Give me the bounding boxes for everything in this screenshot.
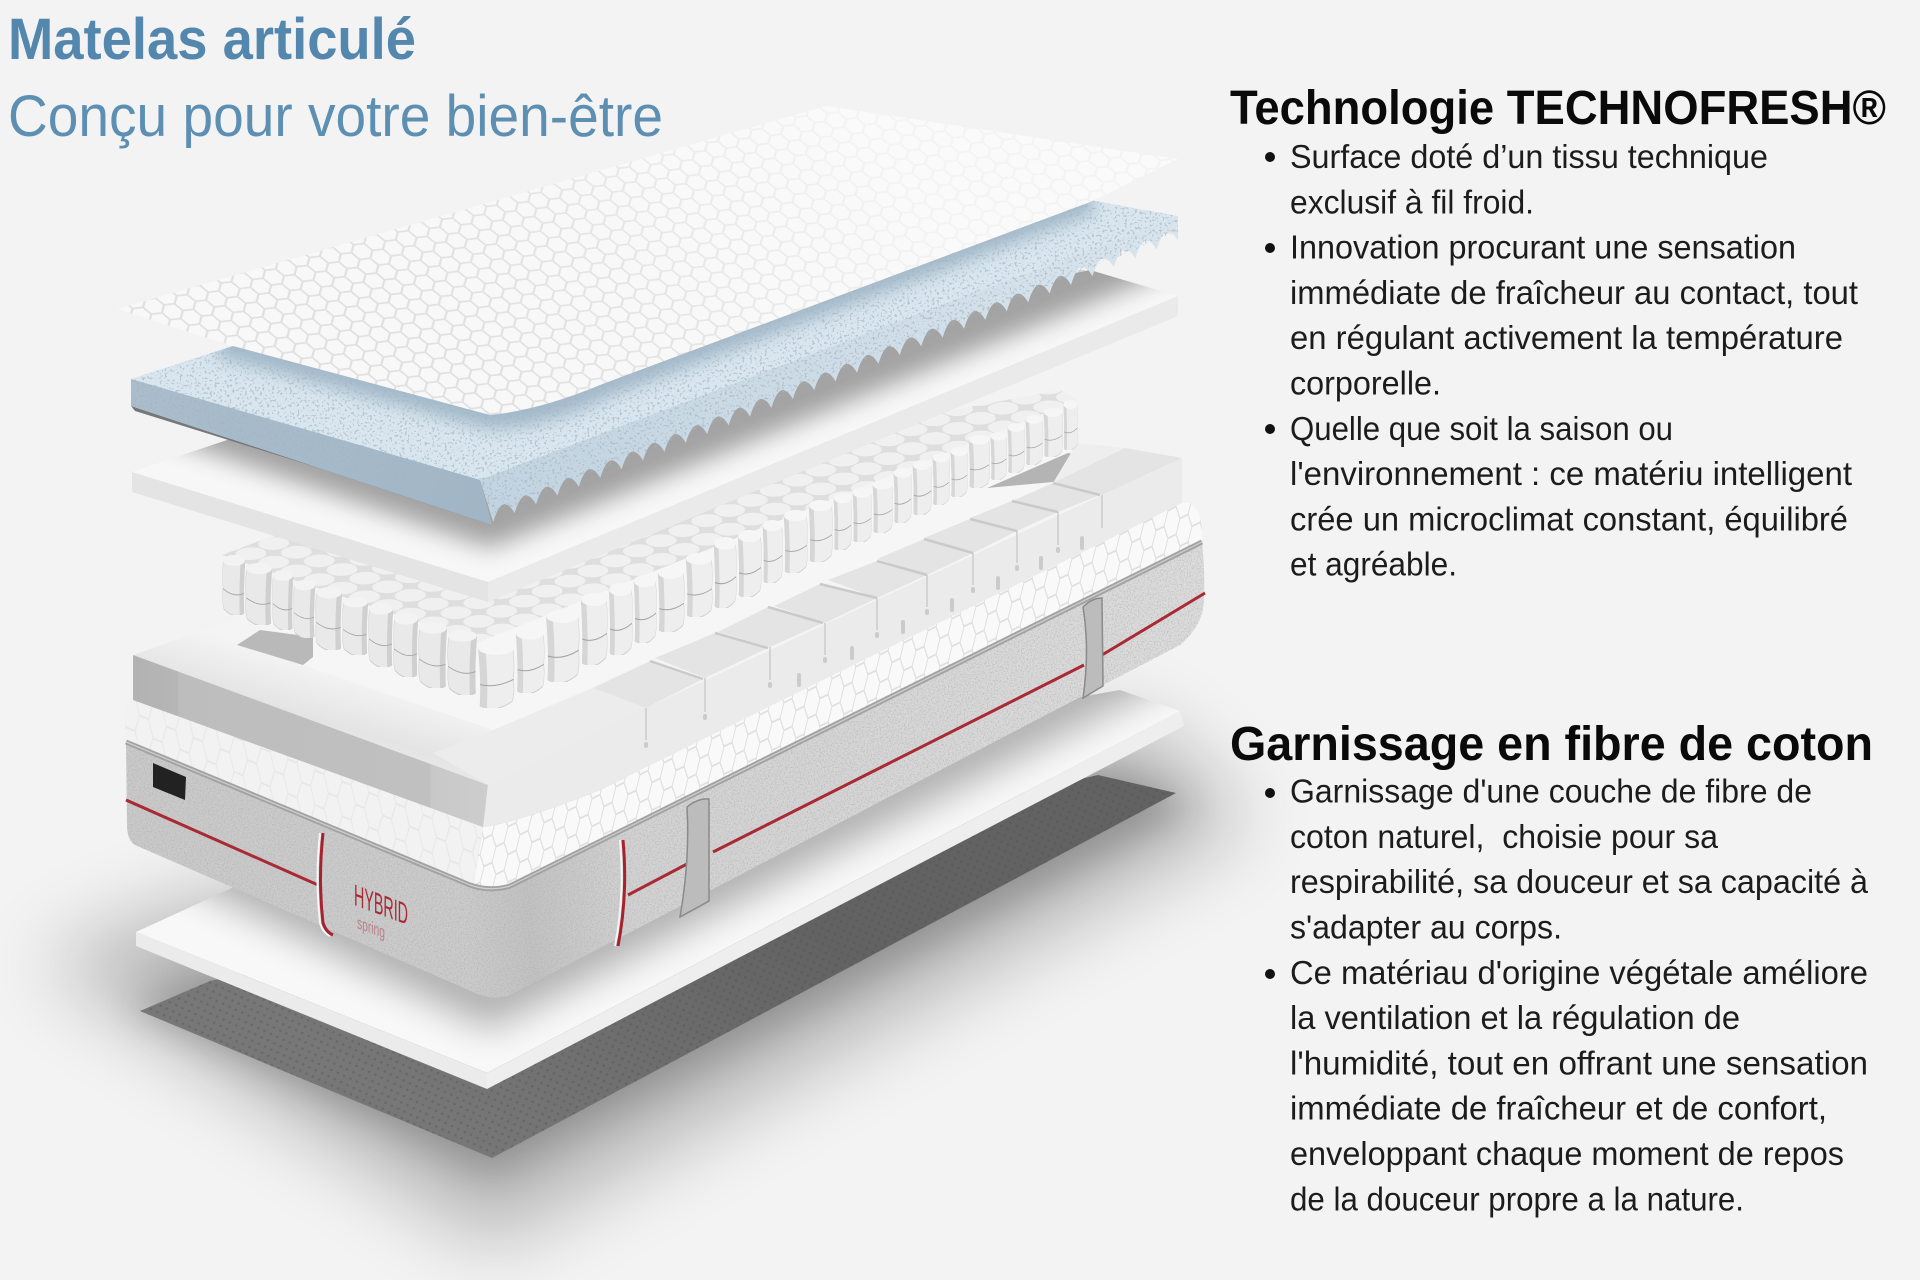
inner wall left <box>237 630 313 665</box>
bullet text: Ce matériau d'origine végétale améliore <box>1290 954 1868 991</box>
bullet text: en régulant activement la température <box>1290 319 1843 356</box>
layer: foam frame with zoned blocks <box>133 443 1182 827</box>
quilted band left side <box>125 698 483 887</box>
bullet text: immédiate de fraîcheur et de confort, <box>1290 1090 1827 1127</box>
zone notches <box>646 495 1102 740</box>
section: Garnissage en fibre de coton <box>1230 718 1873 1217</box>
blue foam speckle <box>131 200 1178 515</box>
bullet text: immédiate de fraîcheur au contact, tout <box>1290 274 1858 311</box>
springs front row <box>479 400 1078 709</box>
bullet text: respirabilité, sa douceur et sa capacité à <box>1290 863 1869 900</box>
inner wall right <box>987 453 1100 488</box>
bullets <box>1265 788 1275 979</box>
frame back strip <box>1053 443 1125 495</box>
bullet text: Surface doté d’un tissu technique <box>1290 138 1768 175</box>
layer: white comfort foam <box>132 270 1178 602</box>
bullet text: corporelle. <box>1290 364 1441 402</box>
block edge shading <box>650 483 1100 679</box>
red piping <box>126 593 1205 895</box>
left face <box>133 655 488 827</box>
springs top surface <box>222 390 1077 643</box>
block tops <box>593 448 1182 708</box>
zipper piping <box>126 542 1202 889</box>
heading: Technologie TECHNOFRESH® <box>1230 82 1886 135</box>
springs left row <box>223 555 477 696</box>
section: Technologie TECHNOFRESH <box>1230 82 1886 583</box>
blue underside line <box>131 406 492 525</box>
blue right face profile <box>480 216 1178 522</box>
grey knitted side panels <box>126 542 1204 998</box>
frame top face <box>133 443 1182 785</box>
knit grain <box>126 542 1204 998</box>
mattress body: HYBRID <box>354 878 408 932</box>
quilted band right side <box>473 503 1202 889</box>
blue shading along fabric <box>220 196 1090 412</box>
frame opening <box>270 443 1077 730</box>
bullets <box>1265 152 1275 434</box>
bullet text: crée un microclimat constant, équilibré <box>1290 500 1848 537</box>
bullet text: exclusif à fil froid. <box>1290 183 1534 220</box>
blue left face <box>131 379 492 525</box>
layer: pocket springs <box>222 390 1078 709</box>
bullet text: coton naturel, choisie pour sa <box>1290 818 1719 855</box>
layer: blue gel foam <box>131 196 1178 525</box>
title: Matelas articulé <box>8 7 416 72</box>
bullet text <box>1290 138 1858 583</box>
red vertical trims <box>318 833 625 946</box>
bullet text: Quelle que soit la saison ou <box>1290 410 1673 447</box>
black label <box>153 763 186 800</box>
heading: Garnissage en fibre de coton <box>1230 718 1873 771</box>
bullet text <box>1290 773 1869 1217</box>
notch drops <box>646 538 1082 746</box>
bullet text: Innovation procurant une sensation <box>1290 229 1796 266</box>
layer: bottom white foam sheet <box>136 690 1184 1089</box>
layer: dark base fabric <box>140 775 1176 1158</box>
ground shadow <box>40 720 1250 1245</box>
bullet text: l'humidité, tout en offrant une sensation <box>1290 1044 1868 1081</box>
frame corner strip <box>433 688 646 785</box>
bullet text: enveloppant chaque moment de repos <box>1290 1135 1844 1172</box>
handle: front <box>680 799 709 917</box>
bullet text: la ventilation et la régulation de <box>1290 999 1740 1036</box>
bullet text: s'adapter au corps. <box>1290 908 1562 946</box>
bullet text: Garnissage d'une couche de fibre de <box>1290 773 1812 810</box>
brand text spring: spring <box>357 913 385 942</box>
blue top face <box>131 200 1178 480</box>
bullet text: l'environnement : ce matériu intelligent <box>1290 455 1852 492</box>
right face <box>483 458 1182 827</box>
bullet text: de la douceur propre a la nature. <box>1290 1180 1744 1217</box>
layer: cooling top fabric <box>117 106 1178 415</box>
mattress body <box>125 503 1205 998</box>
handle: right <box>1083 598 1103 698</box>
bullet text: et agréable. <box>1290 546 1457 583</box>
subtitle: Conçu pour votre bien-être <box>8 84 663 149</box>
